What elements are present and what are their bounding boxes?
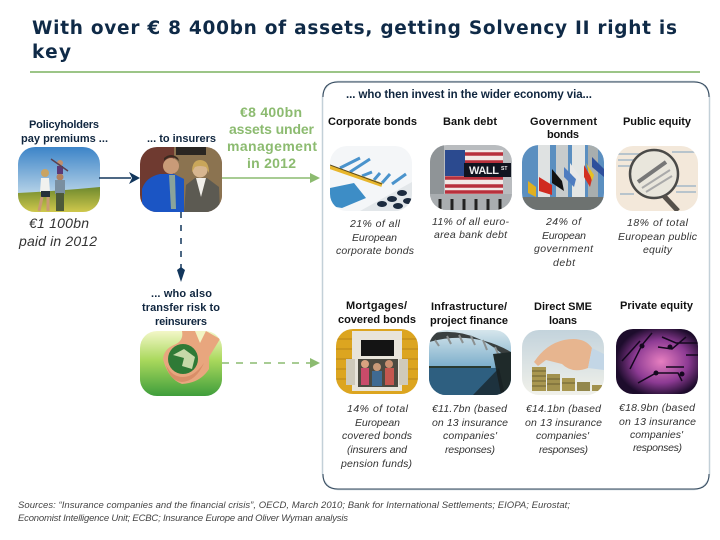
column: government bonds: bonds <box>547 129 579 141</box>
column: private equity <box>616 300 698 454</box>
title: key <box>32 42 71 63</box>
policyholders heading: pay premiums ... <box>21 133 108 145</box>
caption: €11.7bn (based <box>432 403 508 415</box>
column: bank debt: Bank debt <box>443 116 497 128</box>
column: public equity: Public equity <box>623 116 692 128</box>
caption: corporate bonds <box>336 245 415 257</box>
caption: responses) <box>539 444 588 456</box>
title: With over € 8 400bn of assets, getting Solvency II right is <box>32 18 677 39</box>
reinsurers label: reinsurers <box>155 316 207 328</box>
arrow: assets under management <box>222 173 320 183</box>
caption: on 13 insurance <box>432 417 508 429</box>
column: public equity <box>616 116 698 256</box>
column: direct SME loans <box>522 301 604 456</box>
column: infrastructure: Infrastructure/ <box>431 301 507 313</box>
caption: on 13 insurance <box>619 416 696 428</box>
column: mortgages <box>336 300 418 470</box>
insurers label: ... to insurers <box>147 133 216 145</box>
assets callout: €8 400bn <box>240 104 302 120</box>
assets callout <box>227 104 317 171</box>
caption: responses) <box>445 444 495 456</box>
caption: premiums paid <box>18 215 97 249</box>
caption: 18% of total <box>627 217 689 229</box>
caption <box>618 217 698 256</box>
caption <box>619 402 696 454</box>
sources footnote: Economist Intelligence Unit; ECBC; Insurance Europe and Oliver Wyman analysis <box>18 513 348 524</box>
caption <box>432 403 508 456</box>
assets callout: management <box>227 138 317 154</box>
image: family in field <box>18 147 100 212</box>
caption: companies' <box>536 430 590 442</box>
reinsurers label <box>142 288 220 328</box>
caption <box>432 216 510 241</box>
image: hands holding globe <box>140 331 222 396</box>
caption: 14% of total <box>347 403 409 415</box>
arrow: insurers to reinsurers <box>177 212 185 282</box>
arrow: reinsurers dashed <box>222 358 320 368</box>
caption: 24% of <box>545 216 582 228</box>
column: infrastructure: project finance <box>430 315 508 327</box>
caption: government <box>534 243 594 255</box>
caption: area bank debt <box>434 229 508 241</box>
caption: European <box>352 232 397 244</box>
caption: (insurers and <box>347 444 408 456</box>
caption: premiums paid: €1 100bn <box>29 215 89 231</box>
panel: wider economy investments <box>322 82 710 490</box>
image: charts and calculator <box>330 146 413 211</box>
title <box>32 18 677 63</box>
sources footnote <box>18 500 570 524</box>
column: corporate bonds <box>328 116 417 257</box>
caption <box>534 216 594 269</box>
column: mortgages: Mortgages/ <box>346 300 407 312</box>
reinsurers label: ... who also <box>151 288 212 300</box>
column: direct SME loans: Direct SME <box>534 301 592 313</box>
column: infrastructure <box>429 301 511 456</box>
caption: companies' <box>630 429 684 441</box>
caption: €14.1bn (based <box>526 403 602 415</box>
column: mortgages: covered bonds <box>338 314 416 326</box>
column: government bonds: Government <box>530 116 597 128</box>
image: Wall Street flag <box>430 145 512 210</box>
assets callout: in 2012 <box>247 155 296 171</box>
column: government bonds <box>522 116 604 269</box>
policyholders heading: Policyholders <box>29 119 99 131</box>
caption: covered bonds <box>342 430 413 442</box>
image: bridge over water <box>429 330 511 395</box>
caption: equity <box>643 244 673 256</box>
caption: premiums paid: paid in 2012 <box>18 233 97 249</box>
caption: European <box>542 230 586 242</box>
panel heading: ... who then invest in the wider economy via... <box>346 89 592 101</box>
caption: European public <box>618 231 698 243</box>
caption <box>525 403 602 456</box>
caption: on 13 insurance <box>525 417 602 429</box>
panel outline <box>322 82 710 490</box>
policyholders heading <box>21 119 108 145</box>
sources footnote: Sources: “Insurance companies and the financial crisis”, OECD, March 2010; Bank for International Settlements; EIOPA; Eurostat; <box>18 500 570 511</box>
caption: €18.9bn (based <box>619 402 696 414</box>
image: hand stacking coins <box>522 330 604 395</box>
caption: European <box>355 417 400 429</box>
image: children in window <box>336 329 418 394</box>
caption: pension funds) <box>340 458 412 470</box>
caption <box>340 403 413 470</box>
caption: debt <box>553 257 576 269</box>
column: direct SME loans: loans <box>549 315 577 327</box>
image: Wall Street flag: ST <box>501 166 507 172</box>
reinsurers label: transfer risk to <box>142 302 220 314</box>
image: magnifying glass on newspaper <box>616 146 698 211</box>
image: circuit board <box>616 329 698 394</box>
caption: companies' <box>443 430 498 442</box>
column: bank debt <box>430 116 512 241</box>
column: private equity: Private equity <box>620 300 694 312</box>
arrow: premiums to insurers <box>99 172 140 184</box>
image: flags and columns <box>522 145 604 210</box>
caption <box>336 218 415 257</box>
caption: 21% of all <box>349 218 401 230</box>
caption: responses) <box>633 442 682 454</box>
image: Wall Street flag: WALL <box>469 165 499 177</box>
image: business people <box>140 147 222 212</box>
assets callout: assets under <box>229 121 315 137</box>
caption: 11% of all euro- <box>432 216 510 228</box>
column: corporate bonds: Corporate bonds <box>328 116 417 128</box>
